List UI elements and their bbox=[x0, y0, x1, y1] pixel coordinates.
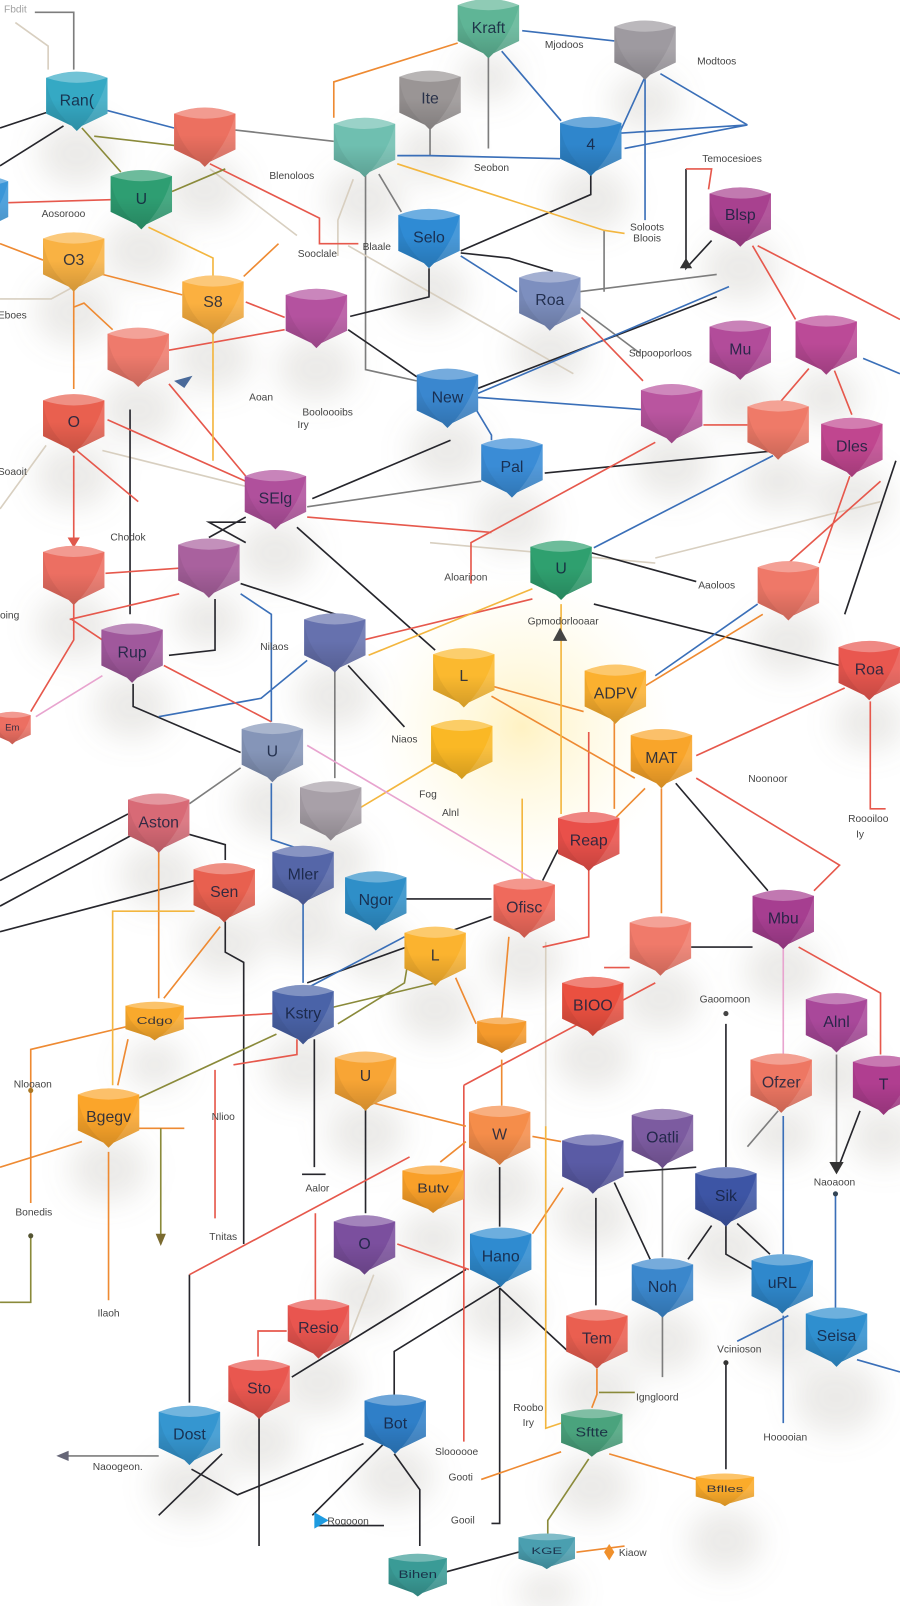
small text labels: Mjodoos bbox=[545, 40, 583, 51]
node: magenta bbox=[796, 315, 857, 375]
node: Dost: Dost bbox=[173, 1427, 206, 1444]
node: Reap: Reap bbox=[570, 833, 608, 850]
small text labels: Naoaoon bbox=[814, 1178, 856, 1189]
node: Ngor bbox=[345, 871, 406, 931]
small text labels: Hooooian bbox=[763, 1433, 807, 1444]
node: ADPV bbox=[585, 664, 646, 724]
node: Reap bbox=[558, 812, 619, 871]
node: Tem bbox=[566, 1309, 628, 1369]
node: U green: U bbox=[136, 191, 147, 208]
small text labels: Sloooooe bbox=[435, 1447, 479, 1458]
small text labels: Kiaow bbox=[619, 1548, 647, 1559]
node: coral mid bbox=[630, 916, 691, 976]
node: gray lower bbox=[300, 781, 361, 841]
node: Bihen bbox=[389, 1554, 447, 1596]
node: L orange bbox=[404, 927, 466, 986]
node: Aston bbox=[128, 793, 189, 853]
node: SElg bbox=[245, 470, 306, 529]
node: Alnl bbox=[806, 993, 867, 1053]
node: Resio bbox=[288, 1299, 349, 1359]
node: purple center bbox=[641, 384, 702, 443]
small text labels: Fbdit bbox=[4, 4, 27, 15]
small text labels: Aalor bbox=[305, 1184, 330, 1195]
node: U central green bbox=[530, 541, 592, 600]
node: Hano bbox=[470, 1228, 531, 1287]
small text labels: Seobon bbox=[474, 163, 509, 174]
small text labels: Soloots bbox=[630, 222, 664, 233]
node: coral bbox=[108, 328, 169, 387]
small text labels: Gaoomoon bbox=[700, 994, 750, 1005]
node: Roa red bbox=[839, 641, 900, 700]
node: W bbox=[469, 1106, 530, 1165]
node: S8: S8 bbox=[203, 294, 223, 311]
node: Rup: Rup bbox=[118, 644, 147, 661]
node: O red bbox=[43, 394, 104, 454]
blue connectors bbox=[108, 31, 900, 1423]
small text labels: Roooiloo bbox=[848, 814, 889, 825]
node: Sto bbox=[228, 1360, 290, 1419]
central yellow glow bbox=[369, 573, 676, 881]
node: Noh bbox=[632, 1258, 693, 1318]
node: Bflles bbox=[696, 1473, 754, 1506]
node: Sen: Sen bbox=[210, 884, 238, 901]
node: Kstry bbox=[272, 985, 334, 1044]
small text labels: Nlioo bbox=[212, 1112, 235, 1123]
node: Bgegv bbox=[78, 1088, 139, 1148]
small text labels: Tnitas bbox=[209, 1232, 237, 1243]
node: New bbox=[417, 369, 478, 428]
node: Roa red: Roa bbox=[855, 662, 884, 679]
node: Roa slate: Roa bbox=[535, 292, 565, 309]
small arrows and markers bbox=[28, 258, 844, 1560]
node: indigo lower bbox=[562, 1134, 624, 1194]
node: Oatli: Oatli bbox=[646, 1130, 679, 1147]
small text labels: Vcinioson bbox=[717, 1344, 762, 1355]
small text labels: Temocesioes bbox=[702, 154, 762, 165]
node: Selo: Selo bbox=[413, 230, 445, 247]
node: Seisa: Seisa bbox=[817, 1328, 857, 1345]
small text labels: Aloarioon bbox=[444, 573, 488, 584]
node: L orange: L bbox=[431, 947, 440, 964]
small text labels: Nlooaon bbox=[14, 1079, 52, 1090]
node: Ite bbox=[399, 71, 461, 130]
node: small orange bbox=[477, 1017, 526, 1053]
small text labels: Iy bbox=[856, 830, 865, 841]
small text labels: Iry bbox=[297, 420, 310, 431]
node: L yellow bbox=[433, 648, 495, 707]
node: Bihen: Bihen bbox=[398, 1568, 437, 1581]
node: Bflles: Bflles bbox=[706, 1484, 743, 1494]
node: KGE: KGE bbox=[531, 1545, 562, 1556]
node: U green bbox=[111, 170, 172, 229]
node: Sftte: Sftte bbox=[575, 1426, 608, 1440]
small text labels: Ilaoh bbox=[97, 1309, 120, 1320]
node: Blsp bbox=[710, 187, 771, 247]
node: coral west bbox=[43, 546, 104, 605]
amber connectors bbox=[113, 164, 625, 1428]
node: Sen bbox=[194, 863, 255, 922]
node: Hano: Hano bbox=[482, 1248, 520, 1265]
node: Cdgo: Cdgo bbox=[137, 1014, 173, 1026]
node: Selo bbox=[398, 209, 460, 268]
node: Cdgo bbox=[125, 1002, 184, 1040]
node: L yellow: L bbox=[459, 668, 468, 685]
node: Dles: Dles bbox=[836, 439, 868, 456]
small text labels: Noonoor bbox=[748, 774, 788, 785]
node: ADPV: ADPV bbox=[594, 685, 637, 702]
node: Oatli bbox=[632, 1109, 693, 1168]
node: teal bbox=[334, 118, 395, 177]
node: mauve bbox=[178, 539, 240, 598]
node: Mu bbox=[710, 320, 771, 380]
node: U central green: U bbox=[555, 560, 567, 577]
node: Kraft: Kraft bbox=[472, 20, 506, 37]
small text labels: Nilaos bbox=[260, 642, 289, 653]
small text labels: Booloooibs bbox=[302, 408, 353, 419]
node: Butv bbox=[402, 1166, 464, 1213]
node: 4 bbox=[560, 117, 621, 176]
small text labels: Bloois bbox=[633, 234, 661, 245]
node: blue left edge bbox=[0, 175, 8, 234]
node: yellow center bbox=[431, 720, 492, 779]
other colored connectors bbox=[0, 128, 635, 1536]
small text labels: Alnl bbox=[442, 808, 459, 819]
node: Em bbox=[0, 712, 31, 744]
node: O purple bbox=[334, 1215, 395, 1275]
node: New: New bbox=[432, 389, 464, 406]
node: U gray-blue: U bbox=[267, 744, 278, 761]
node: Pal bbox=[481, 438, 543, 498]
orange connectors bbox=[0, 43, 763, 1552]
pink connectors bbox=[36, 676, 783, 1055]
node: SElg: SElg bbox=[259, 491, 292, 508]
node: O3: O3 bbox=[63, 252, 84, 269]
node: 4: 4 bbox=[586, 136, 595, 153]
node: MAT: MAT bbox=[645, 750, 678, 767]
node: Kstry: Kstry bbox=[285, 1006, 321, 1023]
node: Bot: Bot bbox=[383, 1415, 408, 1432]
node: Rup bbox=[101, 624, 163, 683]
small text labels: Rogooon bbox=[327, 1517, 369, 1528]
node: Bgegv: Bgegv bbox=[86, 1109, 131, 1126]
node: Ofisc bbox=[494, 878, 555, 938]
small text labels: Fog bbox=[419, 790, 437, 801]
node: Dost bbox=[159, 1406, 220, 1465]
node: Ofisc: Ofisc bbox=[506, 899, 542, 916]
node: W: W bbox=[492, 1127, 507, 1144]
node: Pal: Pal bbox=[500, 459, 523, 476]
node: coral unlabeled bbox=[174, 108, 236, 167]
node: Mler: Mler bbox=[288, 866, 319, 883]
node: Mler bbox=[272, 846, 334, 905]
small text labels: Iry bbox=[523, 1418, 535, 1429]
node: Tem: Tem bbox=[582, 1330, 612, 1347]
red connectors bbox=[8, 164, 900, 1442]
node: uRL bbox=[752, 1254, 813, 1314]
node: indigo bbox=[304, 613, 366, 673]
node: T bbox=[853, 1056, 900, 1115]
node: Resio: Resio bbox=[298, 1320, 339, 1337]
node: Roa slate bbox=[519, 271, 581, 331]
node: Ite: Ite bbox=[421, 90, 439, 107]
node: Aston: Aston bbox=[138, 814, 179, 831]
node: Alnl: Alnl bbox=[823, 1014, 850, 1031]
node: Noh: Noh bbox=[648, 1279, 677, 1296]
small text labels: Aoan bbox=[249, 392, 273, 403]
node: Seisa bbox=[806, 1307, 867, 1367]
node: Mu: Mu bbox=[729, 341, 751, 358]
node: Sftte bbox=[561, 1409, 623, 1457]
node: T: T bbox=[879, 1076, 889, 1093]
node: purple bbox=[286, 289, 347, 348]
node: Em: Em bbox=[5, 723, 19, 732]
small text labels: Roobo bbox=[513, 1403, 544, 1414]
node: Blsp: Blsp bbox=[725, 207, 756, 224]
node: S8 bbox=[182, 275, 244, 335]
node: Ran bbox=[46, 72, 108, 131]
node: Bot bbox=[365, 1394, 426, 1454]
node: BIOO bbox=[562, 977, 624, 1036]
node: gray bbox=[614, 20, 676, 80]
small text labels: Chodok bbox=[110, 533, 146, 544]
node: Ofzer bbox=[750, 1054, 812, 1113]
node: O3 bbox=[43, 232, 104, 292]
small text labels: Sdpooporloos bbox=[629, 348, 692, 359]
node: Sik: Sik bbox=[715, 1188, 737, 1205]
node: Ofzer: Ofzer bbox=[762, 1074, 801, 1091]
node: Kraft bbox=[458, 0, 519, 58]
node: coral right bbox=[747, 400, 809, 460]
node: U amber bbox=[335, 1051, 396, 1111]
node: Dles bbox=[821, 418, 883, 477]
node: Ngor: Ngor bbox=[359, 892, 394, 909]
node: uRL: uRL bbox=[768, 1275, 797, 1292]
node: U gray-blue bbox=[242, 723, 303, 782]
small text labels: Naoogeon. bbox=[93, 1462, 143, 1473]
small text labels: Gooti bbox=[449, 1472, 473, 1483]
small text labels: Sooclale bbox=[298, 249, 337, 260]
node: O red: O bbox=[68, 414, 80, 431]
node: Sto: Sto bbox=[247, 1380, 271, 1397]
node: BIOO: BIOO bbox=[573, 998, 613, 1015]
small text labels: Igngloord bbox=[636, 1393, 679, 1404]
small text labels: Bonedis bbox=[15, 1207, 52, 1218]
small text labels: Niaos bbox=[391, 734, 418, 745]
node: Mbu bbox=[753, 890, 814, 949]
small text labels: Modtoos bbox=[697, 57, 736, 68]
small text labels: Blenoloos bbox=[269, 171, 314, 182]
small text labels: Blaale bbox=[363, 242, 391, 253]
node: Sik bbox=[695, 1167, 757, 1227]
node: O purple: O bbox=[358, 1236, 371, 1253]
node: coral east bbox=[758, 561, 819, 620]
small text labels: Aaoloos bbox=[698, 581, 735, 592]
node: MAT bbox=[631, 729, 692, 788]
small text labels: Gooil bbox=[451, 1515, 475, 1526]
node: Mbu: Mbu bbox=[768, 911, 799, 928]
node: KGE bbox=[518, 1534, 575, 1569]
small text labels: Gpmodorlooaar bbox=[528, 617, 599, 628]
node: Ran: Ran( bbox=[60, 92, 95, 109]
node: Butv: Butv bbox=[417, 1182, 450, 1196]
small text labels: Aosorooo bbox=[42, 209, 86, 220]
node: U amber: U bbox=[360, 1068, 371, 1085]
